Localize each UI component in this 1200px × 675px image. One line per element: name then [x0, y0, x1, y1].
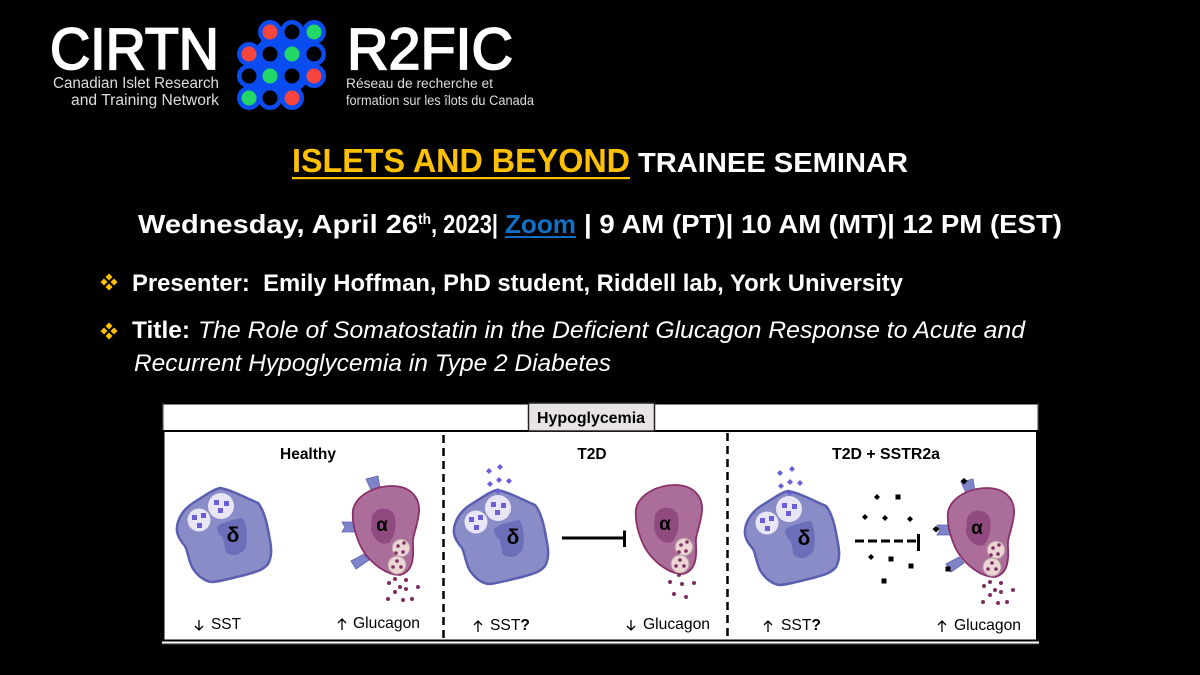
- label: up SST question agonist: SST?: [781, 617, 821, 634]
- date and time line: , 2023|: [431, 209, 498, 239]
- alpha cell T2D plus agonist: α: [971, 518, 983, 539]
- label: up SST question agonist: [764, 617, 821, 634]
- date and time line: Wednesday, April 26: [138, 209, 418, 239]
- date and time line: th: [418, 211, 431, 228]
- logo: R2FIC wordmark: R2FIC: [347, 17, 513, 82]
- panel: healthy: [177, 446, 420, 633]
- presenter text: Presenter: Emily Hoffman, PhD student, Riddell lab, York University: [132, 270, 903, 297]
- delta cell T2D: [454, 490, 548, 584]
- glucagon granules healthy: [386, 577, 420, 602]
- logo: R2FIC wordmark: formation sur les îlots du Canada: [346, 93, 534, 108]
- alpha cell T2D: α: [659, 514, 671, 535]
- logo: CIRTN wordmark: CIRTN: [50, 17, 219, 82]
- label: up glucagon: Glucagon: [353, 615, 420, 632]
- logo: R2FIC wordmark: [346, 17, 534, 108]
- alpha cell healthy: [342, 476, 419, 575]
- inhibition arrow solid: [562, 530, 624, 547]
- header tab: Hypoglycemia: [528, 403, 654, 431]
- logo: R2FIC wordmark: Réseau de recherche et: [346, 76, 493, 91]
- panel: T2D + SSTR2a: [745, 446, 1021, 634]
- inhibition arrow dashed: [855, 534, 918, 551]
- seminar title text: Recurrent Hypoglycemia in Type 2 Diabetes: [134, 350, 611, 377]
- label: up glucagon agonist: Glucagon: [954, 617, 1021, 634]
- agonist molecules: [862, 494, 914, 584]
- seminar title text: Title:: [132, 317, 190, 344]
- alpha cell T2D plus agonist: [932, 478, 1014, 577]
- alpha cell healthy: α: [376, 515, 388, 536]
- seminar title text: [132, 317, 1026, 377]
- bullet icon: title: [100, 322, 118, 340]
- panel: T2D: T2D: [577, 446, 607, 463]
- header tab: Hypoglycemia: Hypoglycemia: [537, 410, 645, 427]
- title: TRAINEE SEMINAR: [638, 147, 908, 178]
- delta cell T2D: δ: [507, 526, 519, 549]
- label: down SST: [195, 616, 241, 633]
- date and time line: Zoom: [505, 209, 576, 239]
- logo: CIRTN wordmark: [50, 17, 219, 109]
- title: ISLETS AND BEYOND: [292, 142, 630, 179]
- panel: healthy: Healthy: [280, 446, 336, 463]
- label: down glucagon: Glucagon: [643, 616, 710, 633]
- bullet icon: presenter: [100, 274, 118, 290]
- delta cell healthy: δ: [227, 524, 239, 547]
- date and time line: | 9 AM (PT)| 10 AM (MT)| 12 PM (EST): [584, 209, 1062, 239]
- seminar title text: The Role of Somatostatin in the Deficient Glucagon Response to Acute and: [198, 317, 1026, 344]
- glucagon granules T2D: [668, 573, 696, 599]
- figure: hypoglycemia diagram: [162, 403, 1039, 645]
- alpha cell T2D: [636, 485, 702, 574]
- delta cell T2D plus agonist: [745, 491, 839, 585]
- title: [292, 142, 908, 179]
- somatostatin granules T2D: [486, 464, 512, 494]
- logo: islet dot grid icon: [237, 20, 326, 110]
- label: up SST question: SST?: [490, 617, 530, 634]
- logo: CIRTN wordmark: Canadian Islet Research: [53, 75, 219, 92]
- glucagon granules T2D plus agonist: [981, 580, 1015, 605]
- delta cell healthy: [177, 488, 271, 582]
- delta cell T2D plus agonist: δ: [798, 527, 810, 550]
- label: down SST: SST: [211, 616, 241, 633]
- logo: CIRTN wordmark: and Training Network: [71, 92, 219, 109]
- somatostatin granules T2D plus agonist: [777, 466, 803, 496]
- panel: T2D + SSTR2a: T2D + SSTR2a: [832, 446, 940, 463]
- panel: T2D: [454, 446, 710, 634]
- date and time line: [138, 209, 1062, 239]
